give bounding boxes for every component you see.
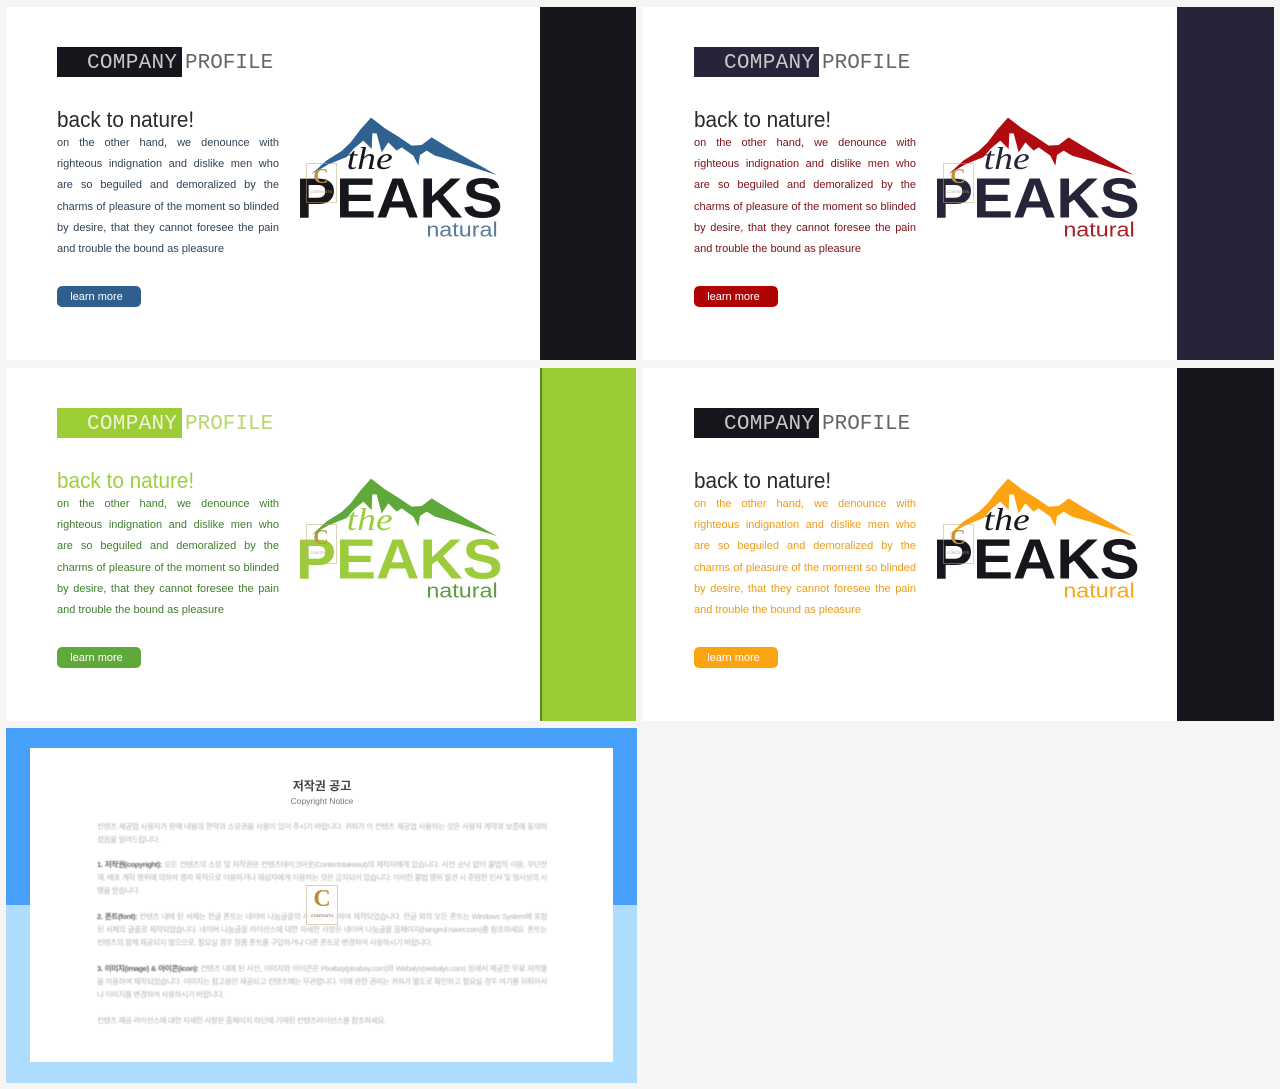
text: 나 이미지를 변경하여 사용하시기 바랍니다. bbox=[97, 990, 224, 999]
icon: watermark: C bbox=[313, 164, 329, 188]
body text: are so beguiled and demoralized by the bbox=[57, 540, 279, 552]
icon: watermark: C bbox=[950, 525, 966, 549]
title tag: company bbox=[694, 47, 819, 77]
icon: watermark: C bbox=[313, 525, 329, 549]
body text: are so beguiled and demoralized by the bbox=[694, 540, 916, 552]
panel: slide 3, green theme bbox=[6, 368, 636, 721]
icon: watermark: CONTENTS bbox=[310, 550, 332, 555]
icon: mountain bbox=[312, 479, 497, 536]
sidebar bbox=[540, 368, 636, 721]
body text: on the other hand, we denounce with bbox=[694, 498, 916, 510]
body text bbox=[57, 137, 279, 255]
heading: back to nature! bbox=[57, 468, 194, 493]
icon: watermark: CONTENTS bbox=[310, 189, 332, 194]
icon: watermark on notice: CONTENTS bbox=[311, 913, 333, 918]
logo word: natural: natural bbox=[426, 220, 498, 242]
body text: charms of pleasure of the moment so blinded bbox=[57, 562, 279, 574]
text block: font clause bbox=[96, 912, 548, 947]
heading: back to nature! bbox=[57, 107, 194, 132]
body text bbox=[57, 498, 279, 616]
button bbox=[57, 647, 141, 668]
text: 2. 폰트(font): 컨텐츠 내에 된 서체는 한글 폰트는 네이버 나눔글꼴의 서체를 사용하여 제작되었습니다. 한글 외의 모든 폰트는 Windows System에 포함 bbox=[97, 912, 547, 921]
panel: slide 2, red theme bbox=[643, 7, 1274, 360]
logo word: natural: natural bbox=[1063, 220, 1135, 242]
logo: the peaks natural bbox=[933, 478, 1140, 603]
logo word: the: the bbox=[984, 140, 1030, 176]
icon: mountain bbox=[949, 118, 1134, 175]
body text: by desire, that they cannot foresee the pain bbox=[57, 222, 279, 234]
body text bbox=[694, 498, 916, 616]
icon: watermark bbox=[942, 524, 974, 564]
panel: slide 4, orange theme bbox=[643, 368, 1274, 721]
text: 셨음을 알려드립니다. bbox=[97, 835, 160, 844]
icon: watermark: C bbox=[950, 164, 966, 188]
icon: watermark: CONTENTS bbox=[947, 550, 969, 555]
text: 재, 배포 개작 행위에 의하여 영리 목적으로 이용하거나 제삼자에게 이용하는 것은 금지되어 있습니다. 이러한 불법 행위 발견 시 준엄한 민사 및 형사상의 시 bbox=[97, 873, 547, 882]
icon: watermark on notice: C bbox=[313, 886, 331, 912]
body text: by desire, that they cannot foresee the pain bbox=[694, 222, 916, 234]
logo: the peaks natural bbox=[933, 118, 1140, 242]
icon: mountain bbox=[312, 118, 497, 175]
icon: watermark bbox=[306, 524, 336, 564]
title: profile: PROFILE bbox=[185, 413, 273, 436]
title tag: company bbox=[694, 408, 819, 438]
body text: on the other hand, we denounce with bbox=[694, 137, 916, 149]
button: learn more bbox=[70, 291, 123, 303]
title tag: company: COMPANY bbox=[724, 52, 814, 75]
body text: and trouble the bound as pleasure bbox=[57, 604, 224, 616]
button: learn more bbox=[70, 652, 123, 664]
text block: copyright clause bbox=[97, 860, 547, 895]
button: learn more bbox=[707, 652, 760, 664]
body text: and trouble the bound as pleasure bbox=[694, 604, 861, 616]
title tag: company: COMPANY bbox=[87, 413, 177, 436]
body text bbox=[694, 137, 916, 255]
body text: by desire, that they cannot foresee the pain bbox=[57, 583, 279, 595]
heading: back to nature! bbox=[694, 468, 831, 493]
icon: mountain bbox=[949, 479, 1134, 536]
body text: righteous indignation and dislike men who bbox=[694, 519, 916, 531]
button: learn more bbox=[707, 291, 760, 303]
body text: charms of pleasure of the moment so blinded bbox=[57, 201, 279, 213]
sidebar bbox=[540, 7, 636, 360]
title: profile: PROFILE bbox=[822, 413, 910, 436]
logo word: natural: natural bbox=[1063, 581, 1135, 603]
panel: slide 1, navy black theme bbox=[6, 7, 636, 360]
logo: the peaks natural bbox=[296, 478, 503, 603]
body text: charms of pleasure of the moment so blinded bbox=[694, 201, 916, 213]
heading: back to nature! bbox=[694, 107, 831, 132]
heading: copyright notice: 저작권 공고 bbox=[293, 779, 351, 793]
logo word: peaks: PEAKS bbox=[296, 529, 503, 592]
title tag: company: COMPANY bbox=[87, 52, 177, 75]
button bbox=[694, 286, 778, 307]
body text: by desire, that they cannot foresee the pain bbox=[694, 583, 916, 595]
subheading: Copyright Notice bbox=[291, 796, 353, 806]
body text: on the other hand, we denounce with bbox=[57, 498, 279, 510]
title tag: company bbox=[57, 408, 182, 438]
logo word: peaks: PEAKS bbox=[933, 168, 1140, 231]
logo word: peaks: PEAKS bbox=[933, 529, 1140, 592]
icon: watermark on notice bbox=[306, 885, 338, 925]
title: profile: PROFILE bbox=[822, 52, 910, 75]
body text: are so beguiled and demoralized by the bbox=[57, 179, 279, 191]
icon: watermark bbox=[306, 163, 336, 203]
logo: the peaks natural bbox=[296, 118, 503, 242]
panel: copyright notice slide bbox=[6, 728, 637, 1083]
body text: and trouble the bound as pleasure bbox=[57, 243, 224, 255]
body text: are so beguiled and demoralized by the bbox=[694, 179, 916, 191]
button bbox=[694, 647, 778, 668]
body text: righteous indignation and dislike men who bbox=[57, 158, 279, 170]
sidebar bbox=[1177, 368, 1274, 721]
title tag: company bbox=[57, 47, 182, 77]
text block: closing note: 컨텐츠 제공 라이선스에 대한 자세한 사항은 홈페이지 하단에 기재된 컨텐츠라이선스를 참조하세요. bbox=[97, 1016, 386, 1025]
title: profile: PROFILE bbox=[185, 52, 273, 75]
text: 컨텐츠 제공업 사용자가 판매 내용의 한약과 소유권을 사용이 있어 주시기 바랍니다. 귀하가 이 컨텐츠 제공업 사용하는 것은 사용자 계약과 보증에 동의하 bbox=[97, 822, 547, 831]
text block: image clause bbox=[96, 964, 547, 999]
body text: righteous indignation and dislike men who bbox=[694, 158, 916, 170]
body text: righteous indignation and dislike men who bbox=[57, 519, 279, 531]
text: 행을 받습니다. bbox=[97, 886, 140, 895]
text: 3. 이미지(image) & 아이콘(icon): 컨텐츠 내에 된 사진, 이미지와 아이콘은 Pixabay(pixabay.com)와 Webalys(webalys.com) 등에서 제공한 무료 저작물 bbox=[97, 964, 547, 973]
text block: introduction bbox=[97, 822, 548, 844]
logo word: the: the bbox=[347, 140, 393, 176]
icon: watermark bbox=[942, 163, 974, 203]
text: 1. 저작권(copyright): 모든 컨텐츠의 소유 및 저작권은 컨텐츠테이크아웃(Contentstakeout)의 제작자에게 있습니다. 사전 승낙 없이 불법적 이용, 무단전 bbox=[97, 860, 547, 869]
body text: on the other hand, we denounce with bbox=[57, 137, 279, 149]
white notice card bbox=[30, 748, 613, 1062]
sidebar bbox=[1177, 7, 1274, 360]
logo word: the: the bbox=[347, 501, 393, 537]
body text: and trouble the bound as pleasure bbox=[694, 243, 861, 255]
logo word: natural: natural bbox=[426, 581, 498, 603]
icon: watermark: CONTENTS bbox=[947, 189, 969, 194]
logo word: the: the bbox=[984, 501, 1030, 537]
title tag: company: COMPANY bbox=[724, 413, 814, 436]
text: 을 이용하여 제작되었습니다. 이미지는 참고용만 제공되고 컨텐츠에는 무관합니다. 이에 관한 권리는 귀하가 별도로 확인하고 필요실 경우 여기를 뒤튀아서 bbox=[97, 977, 547, 986]
text: 된 서체의 글꼴로 제작되었습니다. 네이버 나눔글꼴 라이선스에 대한 자세한 사항은 네이버 나눔글꼴 홈페이지(hangeul.naver.com)를 참조하세요. 폰트는 bbox=[97, 925, 547, 934]
button bbox=[57, 286, 141, 307]
logo word: peaks: PEAKS bbox=[296, 168, 503, 231]
text: 컨텐츠의 함께 제공되지 않으므로, 필요실 경우 정품 폰트를 구입하거나 다른 폰트로 변경하여 사용하시기 바랍니다. bbox=[97, 938, 432, 947]
body text: charms of pleasure of the moment so blinded bbox=[694, 562, 916, 574]
